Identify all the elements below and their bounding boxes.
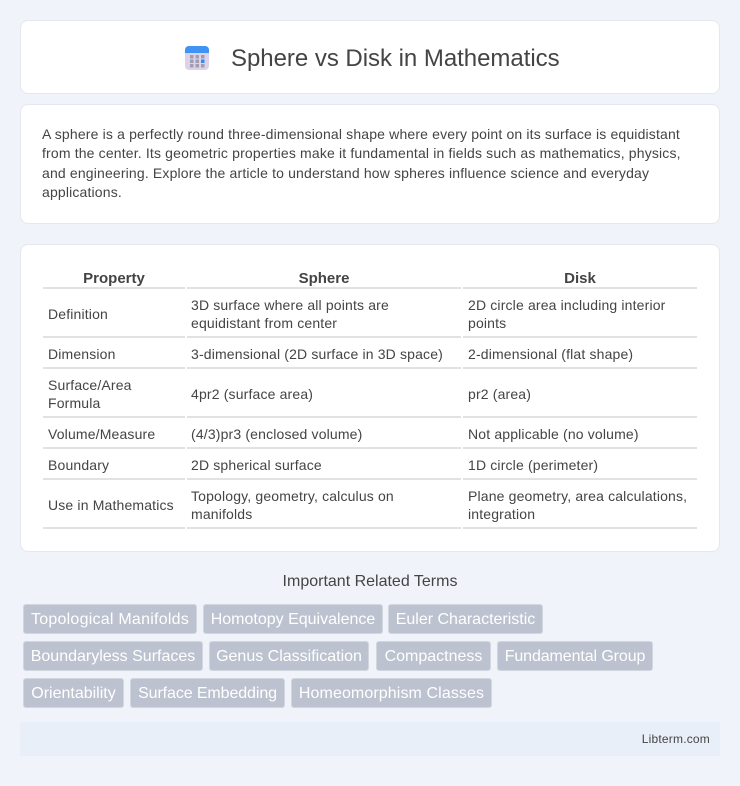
comparison table panel: 2-dimensional (flat shape) xyxy=(468,346,633,362)
tag row 2: Boundaryless Surfaces xyxy=(31,648,195,665)
tag row 1 xyxy=(23,604,197,634)
related term tags: Compactness xyxy=(385,648,482,665)
table header: Sphere: Sphere xyxy=(299,270,349,286)
table header: Property: Property xyxy=(83,270,145,286)
comparison table panel: Topology, geometry, calculus on xyxy=(191,488,394,504)
row: Boundary: Boundary xyxy=(48,457,109,473)
comparison table panel: points xyxy=(468,315,506,331)
footer credit: Libterm.com xyxy=(642,732,710,746)
related term tags: Surface Embedding xyxy=(138,685,277,702)
title: Sphere vs Disk in Mathematics xyxy=(231,45,560,72)
footer bar xyxy=(20,722,720,756)
icon: calendar grid xyxy=(185,46,209,70)
intro panel xyxy=(20,104,720,224)
comparison table panel: 1D circle (perimeter) xyxy=(468,457,598,473)
row: Surface/Area Formula: Formula xyxy=(48,395,100,411)
comparison table panel: equidistant from center xyxy=(191,315,337,331)
comparison table panel: (4/3)pr3 (enclosed volume) xyxy=(191,426,362,442)
intro text xyxy=(42,126,681,200)
comparison table panel: 4pr2 (surface area) xyxy=(191,386,313,402)
intro text: and engineering. Explore the article to understand how spheres influence science and everyday xyxy=(42,165,649,181)
related term tags: Genus Classification xyxy=(216,648,362,665)
row: Use in Mathematics: Use in Mathematics xyxy=(48,497,174,513)
comparison table panel: 3-dimensional (2D surface in 3D space) xyxy=(191,346,443,362)
table header: Disk: Disk xyxy=(564,270,596,286)
tag row 2 xyxy=(23,641,203,671)
header panel xyxy=(20,20,720,94)
comparison table panel: manifolds xyxy=(191,506,252,522)
related term tags: Homeomorphism Classes xyxy=(299,685,484,702)
related term tags: Homotopy Equivalence xyxy=(211,611,375,628)
comparison table panel: 2D spherical surface xyxy=(191,457,322,473)
row: Volume/Measure: Volume/Measure xyxy=(48,426,155,442)
row: Surface/Area Formula: Surface/Area xyxy=(48,377,132,393)
related term tags: Euler Characteristic xyxy=(396,611,535,628)
related term tags: Fundamental Group xyxy=(505,648,645,665)
tag row 3 xyxy=(23,678,124,708)
row: Definition: Definition xyxy=(48,306,108,322)
comparison table panel: pr2 (area) xyxy=(468,386,531,402)
intro text: from the center. Its geometric properties make it fundamental in fields such as mathematics, physics, xyxy=(42,145,681,161)
row: Surface/Area Formula xyxy=(48,377,132,411)
row: Dimension: Dimension xyxy=(48,346,116,362)
intro text: applications. xyxy=(42,184,122,200)
comparison table panel: Not applicable (no volume) xyxy=(468,426,639,442)
related term tags xyxy=(23,604,653,708)
comparison table panel: Plane geometry, area calculations, xyxy=(468,488,687,504)
intro text: A sphere is a perfectly round three-dimensional shape where every point on its surface is equidistant xyxy=(42,126,680,142)
comparison table panel: integration xyxy=(468,506,535,522)
comparison table panel: 3D surface where all points are xyxy=(191,297,389,313)
tag row 1: Topological Manifolds xyxy=(31,611,189,628)
related terms heading: Important Related Terms xyxy=(283,573,457,590)
comparison table panel: 2D circle area including interior xyxy=(468,297,665,313)
tag row 3: Orientability xyxy=(31,685,116,702)
comparison table panel xyxy=(20,244,720,552)
